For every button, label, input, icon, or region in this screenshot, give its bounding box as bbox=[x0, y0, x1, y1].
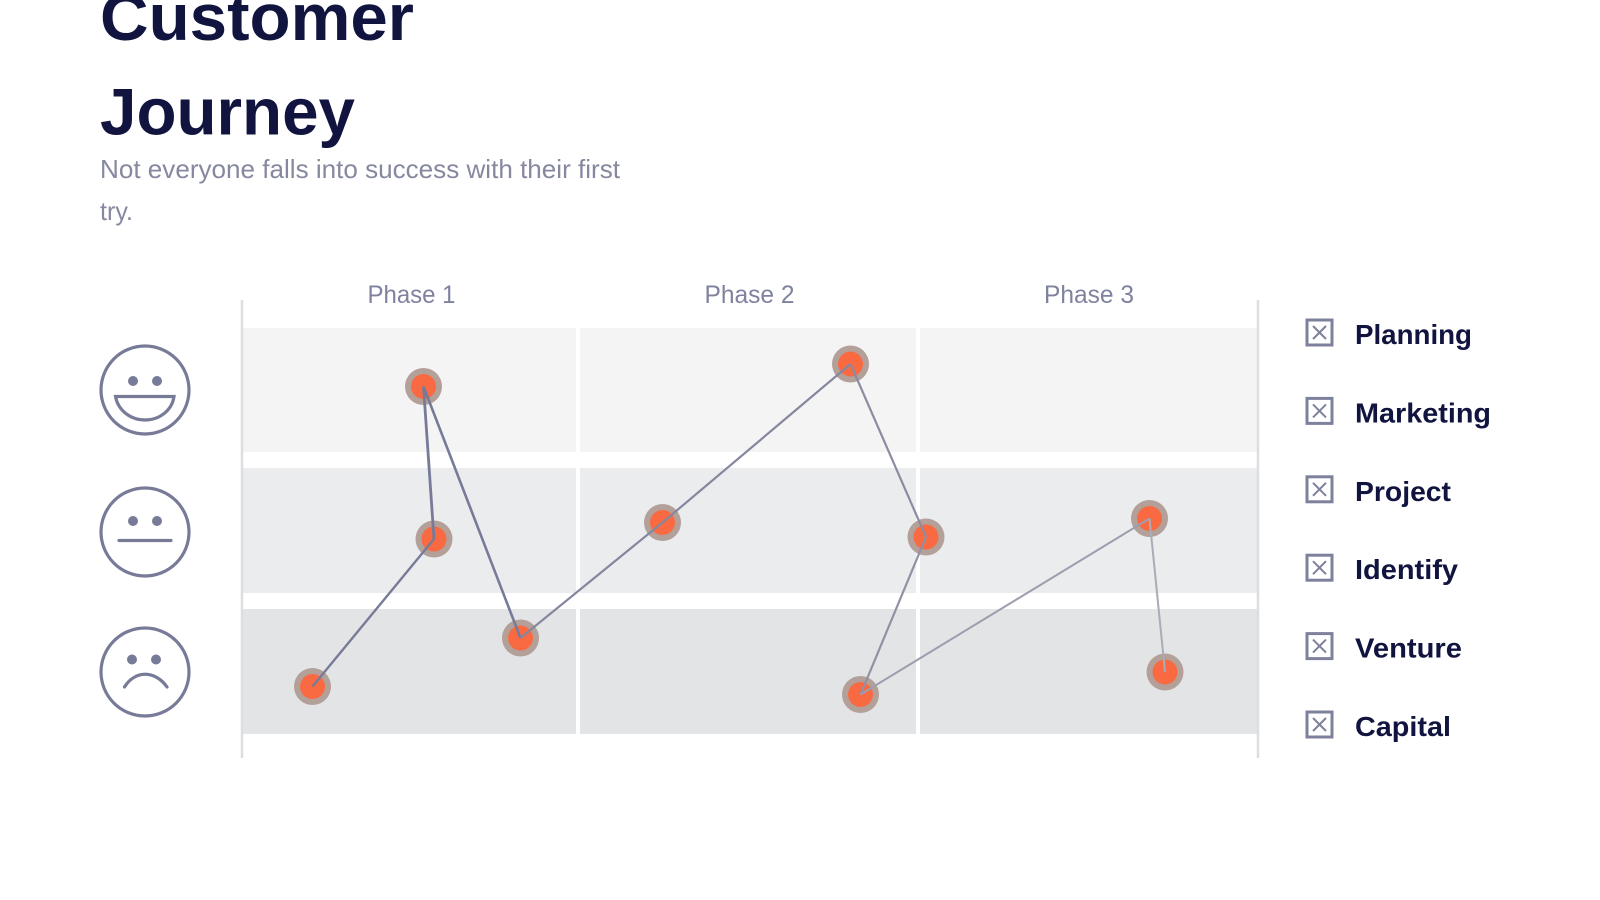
legend item: Planning: Planning bbox=[1355, 319, 1472, 350]
legend item: Capital: Capital bbox=[1355, 711, 1451, 742]
subtitle: try. bbox=[100, 196, 133, 226]
title: Journey bbox=[100, 74, 355, 148]
legend item: Project: Project bbox=[1355, 476, 1451, 507]
panel: mood faces bbox=[101, 346, 189, 716]
icon: neutral face bbox=[101, 488, 189, 576]
icon: happy face bbox=[101, 346, 189, 434]
legend item: Capital bbox=[1307, 711, 1451, 742]
phase labels bbox=[368, 281, 1134, 309]
legend item: Identify: Identify bbox=[1355, 554, 1458, 585]
phase labels: Phase 3 bbox=[1044, 281, 1134, 309]
chart: journey grid bbox=[242, 281, 1258, 758]
legend item: Project bbox=[1307, 476, 1451, 507]
legend item: Marketing: Marketing bbox=[1355, 397, 1491, 428]
subtitle: Not everyone falls into success with their first bbox=[100, 154, 621, 184]
legend item: Venture: Venture bbox=[1355, 633, 1462, 664]
legend item: Venture bbox=[1307, 633, 1462, 664]
chart background cells bbox=[243, 328, 1257, 734]
icon: sad face bbox=[101, 628, 189, 716]
phase labels: Phase 2 bbox=[704, 281, 794, 309]
phase labels: Phase 1 bbox=[368, 281, 456, 309]
subtitle bbox=[100, 154, 621, 226]
legend item: Identify bbox=[1307, 554, 1458, 585]
journey connecting lines bbox=[312, 364, 1165, 694]
title bbox=[100, 0, 414, 148]
legend bbox=[1307, 319, 1491, 742]
journey data points bbox=[294, 346, 1184, 713]
